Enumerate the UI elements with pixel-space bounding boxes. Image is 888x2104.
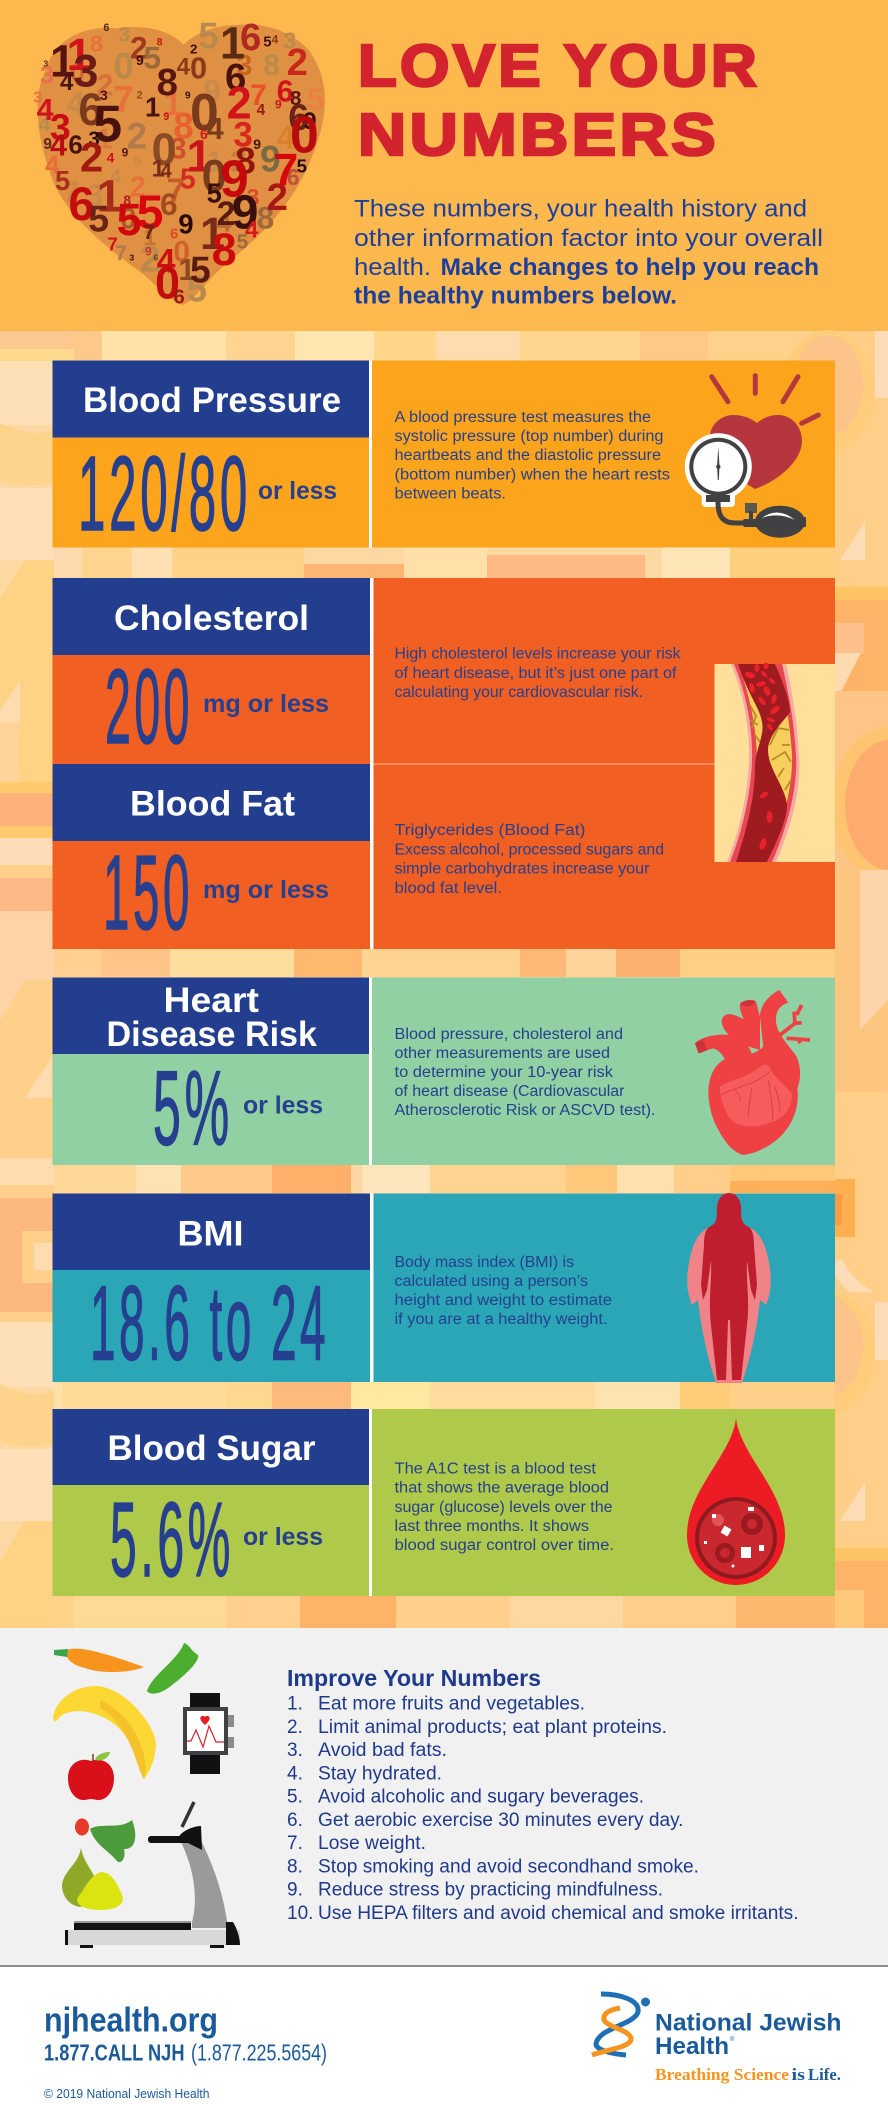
icon: heart made of numbers: 9 xyxy=(253,136,261,152)
description: BMI: height and weight to estimate xyxy=(394,1292,612,1309)
icon: heart made of numbers: 5 xyxy=(187,269,207,310)
icon: heart made of numbers: 5 xyxy=(143,39,161,75)
footer: contact details: njhealth.org xyxy=(44,2002,218,2040)
icon: heart made of numbers: 3 xyxy=(283,27,296,53)
icon: heart made of numbers: 4 xyxy=(37,93,54,127)
list: ten ways to improve: 8. xyxy=(287,1856,303,1877)
description: cholesterol: High cholesterol levels increase your risk xyxy=(394,646,681,662)
unit: mg or less: mg or less xyxy=(203,690,329,718)
icon: heart made of numbers: 4 xyxy=(45,149,60,179)
list: ten ways to improve: 5. xyxy=(287,1787,303,1808)
list: ten ways to improve: Use HEPA filters and avoid chemical and smoke irritants. xyxy=(318,1903,798,1924)
icon: heart made of numbers: 2 xyxy=(217,195,236,233)
icon: heart made of numbers: 5 xyxy=(207,177,222,208)
list: ten ways to improve: 9. xyxy=(287,1880,303,1901)
icon: heart made of numbers: 3 xyxy=(88,128,100,151)
icon: heart made of numbers: 7 xyxy=(167,173,185,210)
icon: heart made of numbers: 1 xyxy=(163,86,182,123)
icon: heart made of numbers: 8 xyxy=(257,199,274,235)
footer: contact details: 1.877.CALL NJH xyxy=(44,2040,184,2066)
icon: heart made of numbers: 7 xyxy=(115,240,127,265)
list: ten ways to improve: 2. xyxy=(287,1717,303,1738)
icon: heart made of numbers: 3 xyxy=(129,252,134,262)
icon: heart made of numbers: 3 xyxy=(233,116,253,155)
footer: contact details: © 2019 National Jewish Health xyxy=(44,2087,210,2101)
list: ten ways to improve: Lose weight. xyxy=(318,1833,426,1854)
icon: pea pod xyxy=(147,1643,198,1694)
icon: heart made of numbers: 9 xyxy=(260,138,281,180)
icon: heart made of numbers: 3 xyxy=(87,179,103,212)
heading: heart disease risk: Heart xyxy=(164,981,259,1020)
icon: heart made of numbers: 0 xyxy=(152,124,177,175)
icon: heart made of numbers: 5 xyxy=(198,15,219,56)
icon: heart made of numbers: 6 xyxy=(225,56,246,99)
description: blood pressure: heartbeats and the diastolic pressure xyxy=(394,447,661,464)
icon: heart made of numbers: 2 xyxy=(137,89,143,101)
icon: heart made of numbers: 2 xyxy=(230,146,247,179)
list: ten ways to improve: Reduce stress by practicing mindfulness. xyxy=(318,1880,663,1901)
description: heart disease risk: of heart disease (Cardiovascular xyxy=(394,1083,624,1100)
icon: heart made of numbers: 4 xyxy=(161,161,172,183)
list: ten ways to improve: Stay hydrated. xyxy=(318,1763,442,1784)
panel: cholesterol and blood fat: 200 xyxy=(105,648,193,766)
icon: heart made of numbers: 3 xyxy=(43,59,48,69)
list: ten ways to improve: 10. xyxy=(287,1903,313,1924)
icon: heart made of numbers: 6 xyxy=(68,178,95,231)
icon: heart made of numbers: 5 xyxy=(117,194,142,245)
description: cholesterol: calculating your cardiovascular risk. xyxy=(394,684,643,701)
list: ten ways to improve xyxy=(287,1694,798,1924)
icon: heart made of numbers: 5 xyxy=(307,81,324,117)
icon: heart made of numbers: 5 xyxy=(88,198,109,240)
logo: National Jewish Health: Health xyxy=(655,2033,729,2060)
icon: heart made of numbers: 4 xyxy=(277,119,296,156)
panel: blood pressure xyxy=(52,360,835,553)
logo: National Jewish Health: Breathing Science xyxy=(655,2065,789,2084)
icon: heart made of numbers: 0 xyxy=(113,45,134,86)
description: blood sugar: The A1C test is a blood test xyxy=(394,1460,597,1478)
icon: heart made of numbers: 5 xyxy=(137,185,164,239)
description: blood sugar: last three months. It shows xyxy=(394,1518,589,1535)
icon: heart made of numbers: 4 xyxy=(157,242,176,280)
intro text xyxy=(354,196,823,310)
icon: heart made of numbers: 5 xyxy=(93,95,122,153)
title: LOVE YOUR xyxy=(358,33,760,99)
icon: heart made of numbers: 0 xyxy=(290,105,319,163)
logo: National Jewish Health xyxy=(592,1994,842,2084)
icon: blood drop xyxy=(687,1418,785,1585)
title xyxy=(358,33,760,168)
icon: heart made of numbers: 4 xyxy=(272,32,279,46)
icon: heart made of numbers: 5 xyxy=(55,165,70,196)
icon: heart made of numbers: 2 xyxy=(130,172,146,204)
icon: heart made of numbers: 6 xyxy=(240,16,261,59)
icon: heart made of numbers: 4 xyxy=(50,129,67,163)
unit: or less: or less xyxy=(258,477,337,505)
heading: heart disease risk xyxy=(106,981,318,1054)
icon: heart made of numbers: 2 xyxy=(140,239,160,280)
icon: heart made of numbers: 2 xyxy=(227,77,252,128)
icon: heart made of numbers: 3 xyxy=(100,87,108,103)
panel: header background xyxy=(0,0,888,331)
description: BMI xyxy=(394,1254,612,1328)
list: ten ways to improve: 3. xyxy=(287,1740,303,1761)
list: ten ways to improve: Get aerobic exercise 30 minutes every day. xyxy=(318,1810,684,1831)
icon: heart made of numbers: 2 xyxy=(267,176,288,219)
icon: treadmill xyxy=(65,1802,240,1948)
description: cholesterol: of heart disease, but it’s just one part of xyxy=(394,665,677,682)
icon: heart made of numbers: 2 xyxy=(190,41,197,56)
icon: heart made of numbers: 2 xyxy=(80,134,103,181)
icon: heart made of numbers: 7 xyxy=(250,79,267,112)
intro text: These numbers, your health history and xyxy=(354,196,807,222)
panel: cholesterol and blood fat xyxy=(52,578,835,952)
icon: heart made of numbers: 3 xyxy=(237,50,252,82)
icon: heart made of numbers: 0 xyxy=(173,236,190,269)
description: blood pressure: between beats. xyxy=(394,486,506,502)
icon: heart made of numbers: 1 xyxy=(143,224,156,250)
icon: heart made of numbers: 6 xyxy=(200,126,208,142)
description: BMI: Body mass index (BMI) is xyxy=(394,1254,574,1271)
icon: heart made of numbers: 2 xyxy=(127,115,147,156)
list: ten ways to improve: 1. xyxy=(287,1694,303,1714)
logo: National Jewish Health: National Jewish xyxy=(655,2010,842,2036)
icon: heart made of numbers: 4 xyxy=(38,112,50,137)
description: blood fat: simple carbohydrates increase your xyxy=(394,860,650,878)
list: ten ways to improve: 7. xyxy=(287,1833,303,1854)
icon: heart made of numbers: 1 xyxy=(178,253,195,287)
heading: heart disease risk: Disease Risk xyxy=(106,1015,318,1054)
icon: heart made of numbers: 8 xyxy=(90,31,103,57)
icon: heart made of numbers: 1 xyxy=(187,131,212,182)
footer: contact details xyxy=(44,2002,327,2101)
icon: heart made of numbers: 0 xyxy=(120,202,137,235)
icon: heart made of numbers: 9 xyxy=(203,73,221,109)
icon: heart made of numbers: 7 xyxy=(107,233,118,254)
icon: heart made of numbers: 4 xyxy=(67,86,86,123)
icon: heart made of numbers: 3 xyxy=(73,46,98,97)
icon: radish with leaves xyxy=(75,1818,135,1862)
description: cholesterol xyxy=(394,646,681,701)
panel: BMI xyxy=(52,1193,835,1383)
icon: heart made of numbers: 6 xyxy=(68,129,83,159)
description: BMI: if you are at a healthy weight. xyxy=(394,1311,608,1328)
icon: heart made of numbers: 9 xyxy=(133,154,141,170)
icon: heart made of numbers: 9 xyxy=(275,97,282,111)
panel: heart disease risk xyxy=(52,978,835,1168)
icon: blood pressure gauge and heart xyxy=(685,376,818,538)
icon: heart made of numbers: 5 xyxy=(297,155,307,176)
icon: heart made of numbers: 1 xyxy=(97,171,122,222)
description: heart disease risk xyxy=(394,1026,656,1119)
icon: heart made of numbers: 5 xyxy=(180,163,196,195)
icon: heart made of numbers: 5 xyxy=(237,230,248,253)
icon: heart made of numbers: 8 xyxy=(263,49,280,82)
panel: blood pressure: 120/80 xyxy=(78,435,251,553)
icon: heart made of numbers: 6 xyxy=(153,252,158,262)
footer: contact details: (1.877.225.5654) xyxy=(191,2040,327,2066)
icon: heart made of numbers: 0 xyxy=(190,51,207,85)
logo: National Jewish Health: ® xyxy=(730,2036,735,2043)
icon: heart made of numbers: 6 xyxy=(288,96,309,138)
description: blood pressure xyxy=(394,409,670,502)
icon: heart made of numbers: 0 xyxy=(70,58,85,88)
icon: smart watch xyxy=(183,1693,234,1774)
icon: heart made of numbers: 7 xyxy=(63,177,79,209)
icon: heart made of numbers: 1 xyxy=(145,92,160,123)
icon: heart made of numbers: 3 xyxy=(118,22,130,47)
icon: heart made of numbers: 4 xyxy=(177,53,191,80)
icon: pears xyxy=(62,1848,123,1910)
description: heart disease risk: other measurements are used xyxy=(394,1045,610,1062)
icon: heart made of numbers: 0 xyxy=(155,257,180,308)
icon: heart made of numbers: 6 xyxy=(277,75,294,109)
list: ten ways to improve: Avoid bad fats. xyxy=(318,1740,447,1761)
icon: heart made of numbers: 6 xyxy=(287,164,300,190)
icon: heart made of numbers: 9 xyxy=(178,208,194,239)
icon: heart made of numbers: 1 xyxy=(200,208,225,259)
icon: banana xyxy=(53,1686,156,1779)
icon: heart made of numbers: 9 xyxy=(145,245,152,259)
description: blood fat: blood fat level. xyxy=(394,880,502,897)
icon: heart made of numbers: 6 xyxy=(103,22,109,34)
description: BMI: calculated using a person’s xyxy=(394,1273,588,1290)
icon: heart made of numbers: 0 xyxy=(190,83,219,141)
icon: heart made of numbers: 5 xyxy=(263,34,272,51)
heading: blood sugar: Blood Sugar xyxy=(108,1429,316,1468)
icon: heart made of numbers: 1 xyxy=(220,17,245,68)
icon: heart made of numbers: 4 xyxy=(207,112,224,146)
icon: body silhouette xyxy=(687,1193,771,1383)
icon: heart made of numbers: 8 xyxy=(157,37,163,49)
icon: heart made of numbers: 3 xyxy=(247,184,260,210)
icon: heart made of numbers: 9 xyxy=(232,185,259,239)
icon: heart made of numbers: 8 xyxy=(157,61,178,104)
icon: heart made of numbers: 8 xyxy=(290,87,301,110)
icon: heart made of numbers: 7 xyxy=(113,79,134,120)
panel: improve your numbers xyxy=(0,1628,888,1967)
description: blood fat: Triglycerides (Blood Fat) xyxy=(394,822,586,839)
icon: heart made of numbers: 6 xyxy=(78,84,103,135)
icon: heart made of numbers: 9 xyxy=(136,52,144,68)
icon: heart made of numbers: 6 xyxy=(173,286,185,309)
intro text: Make changes to help you reach xyxy=(440,254,819,281)
list: ten ways to improve: Limit animal products; eat plant proteins. xyxy=(318,1717,667,1738)
description: blood fat: Excess alcohol, processed sugars and xyxy=(394,842,664,858)
icon: heart made of numbers: 9 xyxy=(43,136,52,153)
icon: heart made of numbers: 8 xyxy=(235,139,256,181)
icon: heart made of numbers: 0 xyxy=(202,151,227,202)
heading: BMI: BMI xyxy=(178,1214,244,1254)
panel: blood sugar: 5.6% xyxy=(110,1481,234,1599)
icon: heart made of numbers: 1 xyxy=(207,146,223,179)
icon: heart made of numbers: 9 xyxy=(185,90,191,101)
description: blood sugar: sugar (glucose) levels over the xyxy=(394,1499,612,1516)
unit: or less: or less xyxy=(243,1523,323,1551)
background pattern of large faded numerals xyxy=(0,330,888,1628)
icon: heart made of numbers: 8 xyxy=(212,224,237,275)
icon: heart made of numbers: 1 xyxy=(97,123,112,155)
icon: heart made of numbers: 9 xyxy=(122,146,129,160)
description: blood pressure: (bottom number) when the heart rests xyxy=(394,466,670,484)
icon: heart made of numbers: 3 xyxy=(40,61,54,89)
icon: heart made of numbers: 7 xyxy=(143,221,155,244)
icon: heart made of numbers: 7 xyxy=(273,144,298,195)
icon: heart made of numbers: 9 xyxy=(303,108,317,135)
heading: blood pressure: Blood Pressure xyxy=(83,381,341,420)
heading: cholesterol: Cholesterol xyxy=(114,599,309,638)
icon: heart made of numbers: 1 xyxy=(152,156,165,183)
description: heart disease risk: Atherosclerotic Risk or ASCVD test). xyxy=(394,1102,656,1119)
description: heart disease risk: Blood pressure, cholesterol and xyxy=(394,1026,623,1043)
description: blood sugar: that shows the average blood xyxy=(394,1480,609,1496)
list: ten ways to improve: 4. xyxy=(287,1763,303,1784)
heading: blood fat: Blood Fat xyxy=(130,784,295,824)
icon: narrowed artery xyxy=(714,662,835,862)
unit: mg or less: mg or less xyxy=(203,876,329,904)
icon: heart made of numbers: 4 xyxy=(245,217,259,244)
icon: heart made of numbers: 9 xyxy=(220,150,249,208)
icon: heart made of numbers: 6 xyxy=(160,186,178,222)
logo: National Jewish Health: Life. xyxy=(808,2065,841,2084)
icon: heart made of numbers: 1 xyxy=(67,29,92,80)
icon: heart made of numbers: 4 xyxy=(257,102,266,119)
icon: heart made of numbers: 4 xyxy=(217,208,232,238)
icon: heart made of numbers: 2 xyxy=(287,41,308,84)
icon: heart made of numbers: 4 xyxy=(110,166,121,188)
heading: improve your numbers: Improve Your Numbers xyxy=(287,1665,541,1691)
unit: or less: or less xyxy=(243,1092,323,1120)
intro text: the healthy numbers below. xyxy=(354,282,677,310)
description: blood pressure: A blood pressure test measures the xyxy=(394,409,651,426)
logo: National Jewish Health: is xyxy=(792,2065,805,2084)
icon: heart made of numbers: 3 xyxy=(50,106,71,148)
icon: apple xyxy=(68,1752,114,1800)
list: ten ways to improve: Avoid alcoholic and sugary beverages. xyxy=(318,1787,644,1808)
intro text: health. xyxy=(354,254,431,281)
description: blood sugar xyxy=(394,1460,614,1554)
title: NUMBERS xyxy=(358,102,719,168)
icon: heart made of numbers: 1 xyxy=(50,36,75,87)
description: blood pressure: systolic pressure (top number) during xyxy=(394,428,664,445)
list: ten ways to improve: Eat more fruits and vegetables. xyxy=(318,1694,585,1714)
icon: heart made of numbers: 2 xyxy=(130,29,148,65)
intro text: other information factor into your overall xyxy=(354,225,823,252)
panel: BMI: 18.6 to 24 xyxy=(90,1264,329,1382)
icon: anatomical heart xyxy=(695,990,810,1155)
icon: heart made of numbers: 2 xyxy=(97,69,113,102)
icon: heart made of numbers: 8 xyxy=(123,192,131,208)
icon: heart made of numbers: 3 xyxy=(33,89,42,106)
panel: blood sugar xyxy=(52,1409,835,1599)
icon: heart made of numbers xyxy=(33,15,325,310)
description: heart disease risk: to determine your 10-year risk xyxy=(394,1064,613,1081)
icon: heart made of numbers: 8 xyxy=(173,105,194,146)
list: ten ways to improve: 6. xyxy=(287,1810,303,1831)
panel: cholesterol and blood fat: 150 xyxy=(103,834,193,952)
icon: heart made of numbers: 3 xyxy=(170,132,187,165)
icon: heart made of numbers: 5 xyxy=(190,248,211,290)
icon: carrot xyxy=(54,1649,144,1672)
icon: heart made of numbers: 6 xyxy=(170,225,178,242)
description: blood fat xyxy=(394,822,664,897)
description: blood sugar: blood sugar control over time. xyxy=(394,1537,614,1554)
icon: heart made of numbers: 4 xyxy=(60,69,74,96)
icon: heart made of numbers: 4 xyxy=(107,149,115,165)
list: ten ways to improve: Stop smoking and avoid secondhand smoke. xyxy=(318,1856,699,1877)
panel: heart disease risk: 5% xyxy=(153,1050,233,1168)
icon: heart made of numbers: 9 xyxy=(163,111,169,123)
